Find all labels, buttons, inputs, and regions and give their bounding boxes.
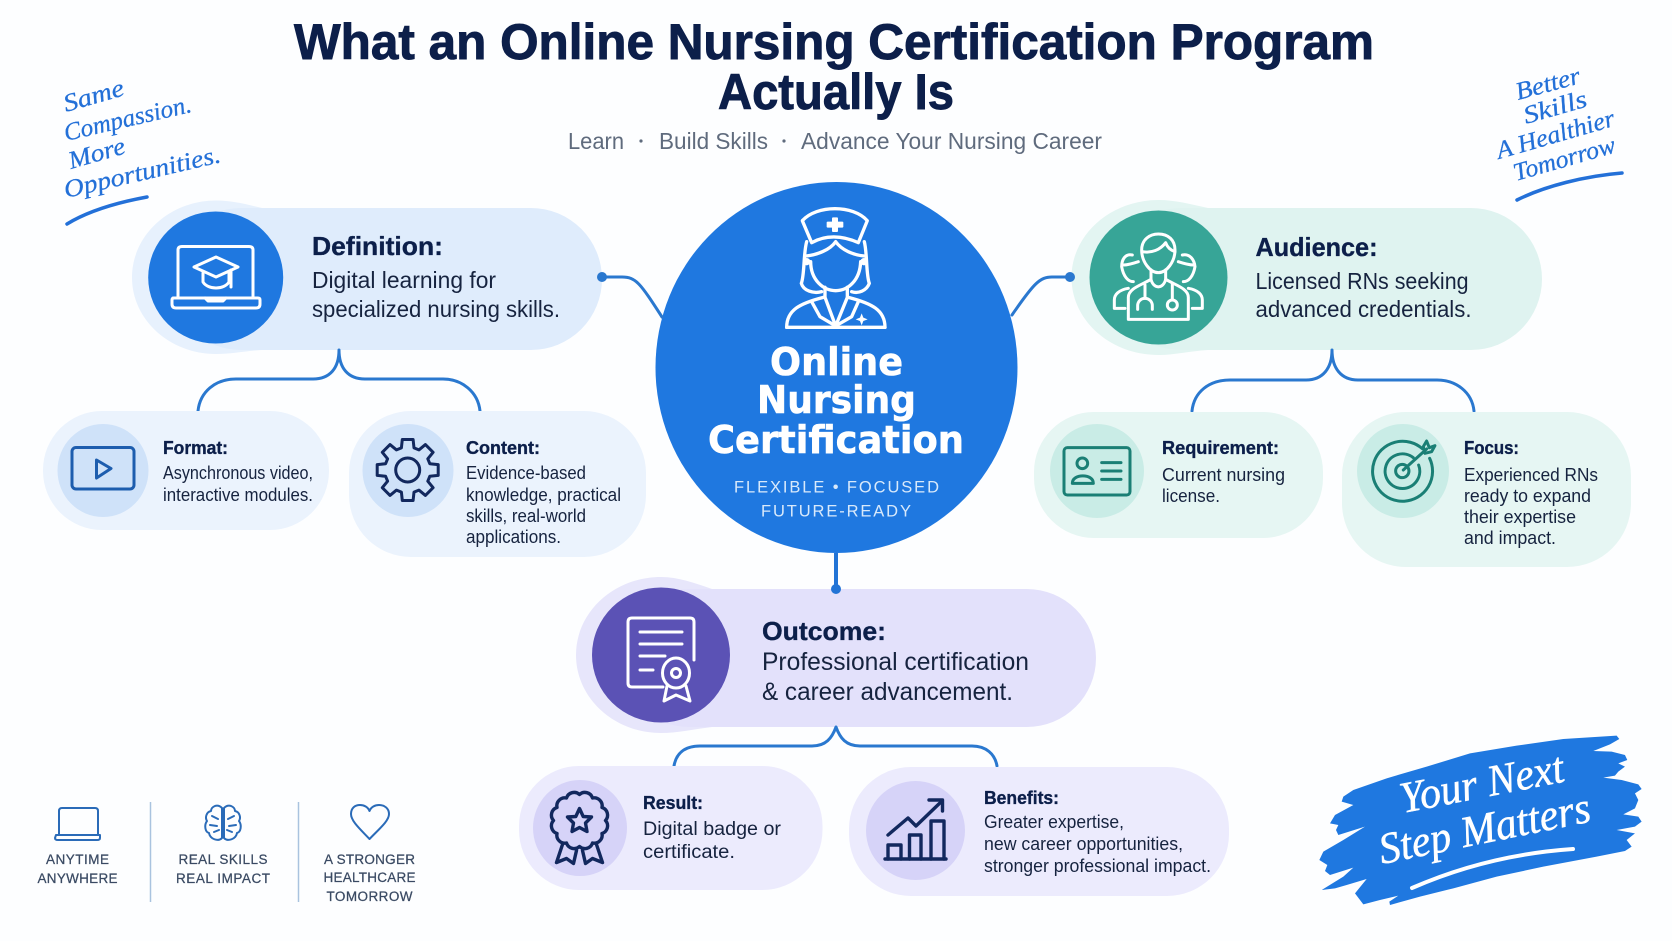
footer: real skills real impact: REAL IMPACT: [176, 871, 270, 886]
text: focus: [1464, 438, 1598, 548]
icon: medical team: [1090, 210, 1228, 344]
text: content: Content:: [466, 438, 540, 458]
icon: laptop: [55, 808, 100, 840]
subtitle: Build Skills: [659, 128, 768, 154]
text: benefits: [984, 788, 1211, 876]
icon: gear: [362, 424, 454, 517]
text: audience: Licensed RNs seeking: [1256, 268, 1468, 294]
connector: centre to outcome: [831, 553, 841, 594]
handwritten note: right: A Healthier: [1491, 105, 1618, 165]
text: definition: [312, 231, 560, 322]
handwritten note: right: Tomorrow: [1510, 132, 1619, 187]
branch connector: definition: [198, 350, 480, 411]
central label: Certification: [708, 418, 964, 462]
text: audience: advanced credentials.: [1256, 296, 1472, 322]
central tagline: FLEXIBLE • FOCUSED: [734, 478, 939, 496]
text: outcome: Outcome:: [762, 616, 886, 646]
connector: audience to centre: [1012, 272, 1075, 315]
branch connector: outcome: [674, 727, 997, 766]
icon: heart: [351, 805, 389, 839]
callout: brush stroke: Step Matters: [1374, 783, 1595, 874]
footer: stronger healthcare tomorrow: TOMORROW: [326, 889, 413, 904]
panel: central circle: [656, 182, 1018, 553]
text: focus: and impact.: [1464, 528, 1556, 548]
text: content: Evidence-based: [466, 463, 586, 483]
text: result: Digital badge or: [643, 819, 782, 840]
footer: stronger healthcare tomorrow: HEALTHCARE: [324, 870, 416, 885]
text: audience: [1256, 232, 1472, 322]
text: focus: ready to expand: [1464, 486, 1591, 506]
panel: benefits: [849, 767, 1229, 896]
panel: format: [43, 411, 329, 530]
text: outcome: Professional certification: [762, 648, 1029, 676]
title: What an Online Nursing Certification Program: [294, 14, 1374, 70]
icon: badge: [533, 780, 627, 876]
subtitle: Advance Your Nursing Career: [801, 128, 1102, 154]
text: audience: Audience:: [1256, 232, 1378, 262]
callout: brush stroke: [1319, 736, 1642, 905]
text: definition: Definition:: [312, 231, 443, 261]
connector: definition to centre: [597, 272, 662, 317]
footer divider: [150, 802, 298, 902]
panel: requirement: [1034, 412, 1323, 538]
text: content: [466, 438, 621, 547]
text: requirement: Requirement:: [1162, 438, 1279, 458]
footer: anytime anywhere: ANYWHERE: [38, 871, 118, 886]
text: format: interactive modules.: [163, 485, 313, 505]
footer: real skills real impact: REAL SKILLS: [178, 852, 268, 867]
text: benefits: new career opportunities,: [984, 834, 1183, 854]
title: Actually Is: [718, 64, 954, 120]
footer: stronger healthcare tomorrow: [324, 805, 416, 904]
subtitle: Learn: [568, 128, 624, 154]
text: format: [163, 438, 313, 505]
text: requirement: Current nursing: [1162, 465, 1285, 485]
footer: real skills real impact: [176, 806, 270, 886]
text: outcome: & career advancement.: [762, 678, 1013, 706]
panel: result: [519, 766, 822, 890]
text: benefits: Benefits:: [984, 788, 1059, 808]
central label: [708, 340, 964, 462]
icon: target: [1357, 424, 1449, 518]
central tagline: [734, 478, 939, 520]
icon: brain: [205, 806, 241, 840]
subtitle: [568, 128, 1102, 154]
panel: outcome: [576, 577, 1096, 733]
central label: Online: [770, 340, 903, 384]
handwritten note: left: Same: [60, 75, 127, 118]
handwritten note: right: [1491, 63, 1622, 200]
text: result: [643, 793, 782, 863]
icon: nurse: [787, 209, 885, 327]
title: [294, 14, 1374, 120]
text: benefits: stronger professional impact.: [984, 856, 1211, 876]
panel: content: [349, 411, 646, 557]
text: result: certificate.: [643, 842, 735, 863]
text: benefits: Greater expertise,: [984, 812, 1124, 832]
text: focus: Focus:: [1464, 438, 1519, 458]
text: format: Asynchronous video,: [163, 463, 313, 483]
text: content: applications.: [466, 527, 561, 547]
text: definition: Digital learning for: [312, 267, 496, 293]
text: focus: Experienced RNs: [1464, 465, 1598, 485]
icon: certificate: [592, 588, 730, 722]
handwritten note: left: Opportunities.: [61, 142, 223, 204]
text: content: knowledge, practical: [466, 485, 621, 505]
text: focus: their expertise: [1464, 507, 1576, 527]
central label: Nursing: [757, 378, 916, 422]
panel: definition: [132, 200, 602, 354]
icon: license card: [1050, 424, 1144, 518]
panel: focus: [1342, 412, 1631, 567]
text: result: Result:: [643, 793, 703, 813]
text: content: skills, real-world: [466, 506, 586, 526]
text: requirement: [1162, 438, 1285, 506]
icon: video play: [58, 424, 148, 517]
icon: growth chart: [866, 781, 965, 880]
icon: laptop with graduation cap: [148, 212, 283, 344]
handwritten note: left: More: [64, 133, 128, 175]
footer: anytime anywhere: ANYTIME: [46, 852, 109, 867]
branch connector: audience: [1192, 350, 1474, 411]
handwritten note: left: Compassion.: [61, 91, 194, 147]
text: requirement: license.: [1162, 486, 1220, 506]
callout: brush stroke: Your Next: [1396, 743, 1570, 823]
handwritten note: right: Better: [1513, 63, 1584, 106]
text: format: Format:: [163, 438, 228, 458]
handwritten note: left: [60, 75, 223, 224]
panel: audience: [1072, 200, 1542, 355]
footer: anytime anywhere: [38, 808, 118, 886]
text: outcome: [762, 616, 1029, 706]
text: definition: specialized nursing skills.: [312, 296, 560, 322]
central tagline: FUTURE-READY: [761, 502, 911, 520]
footer: stronger healthcare tomorrow: A STRONGER: [324, 852, 415, 867]
handwritten note: right: Skills: [1520, 86, 1590, 130]
